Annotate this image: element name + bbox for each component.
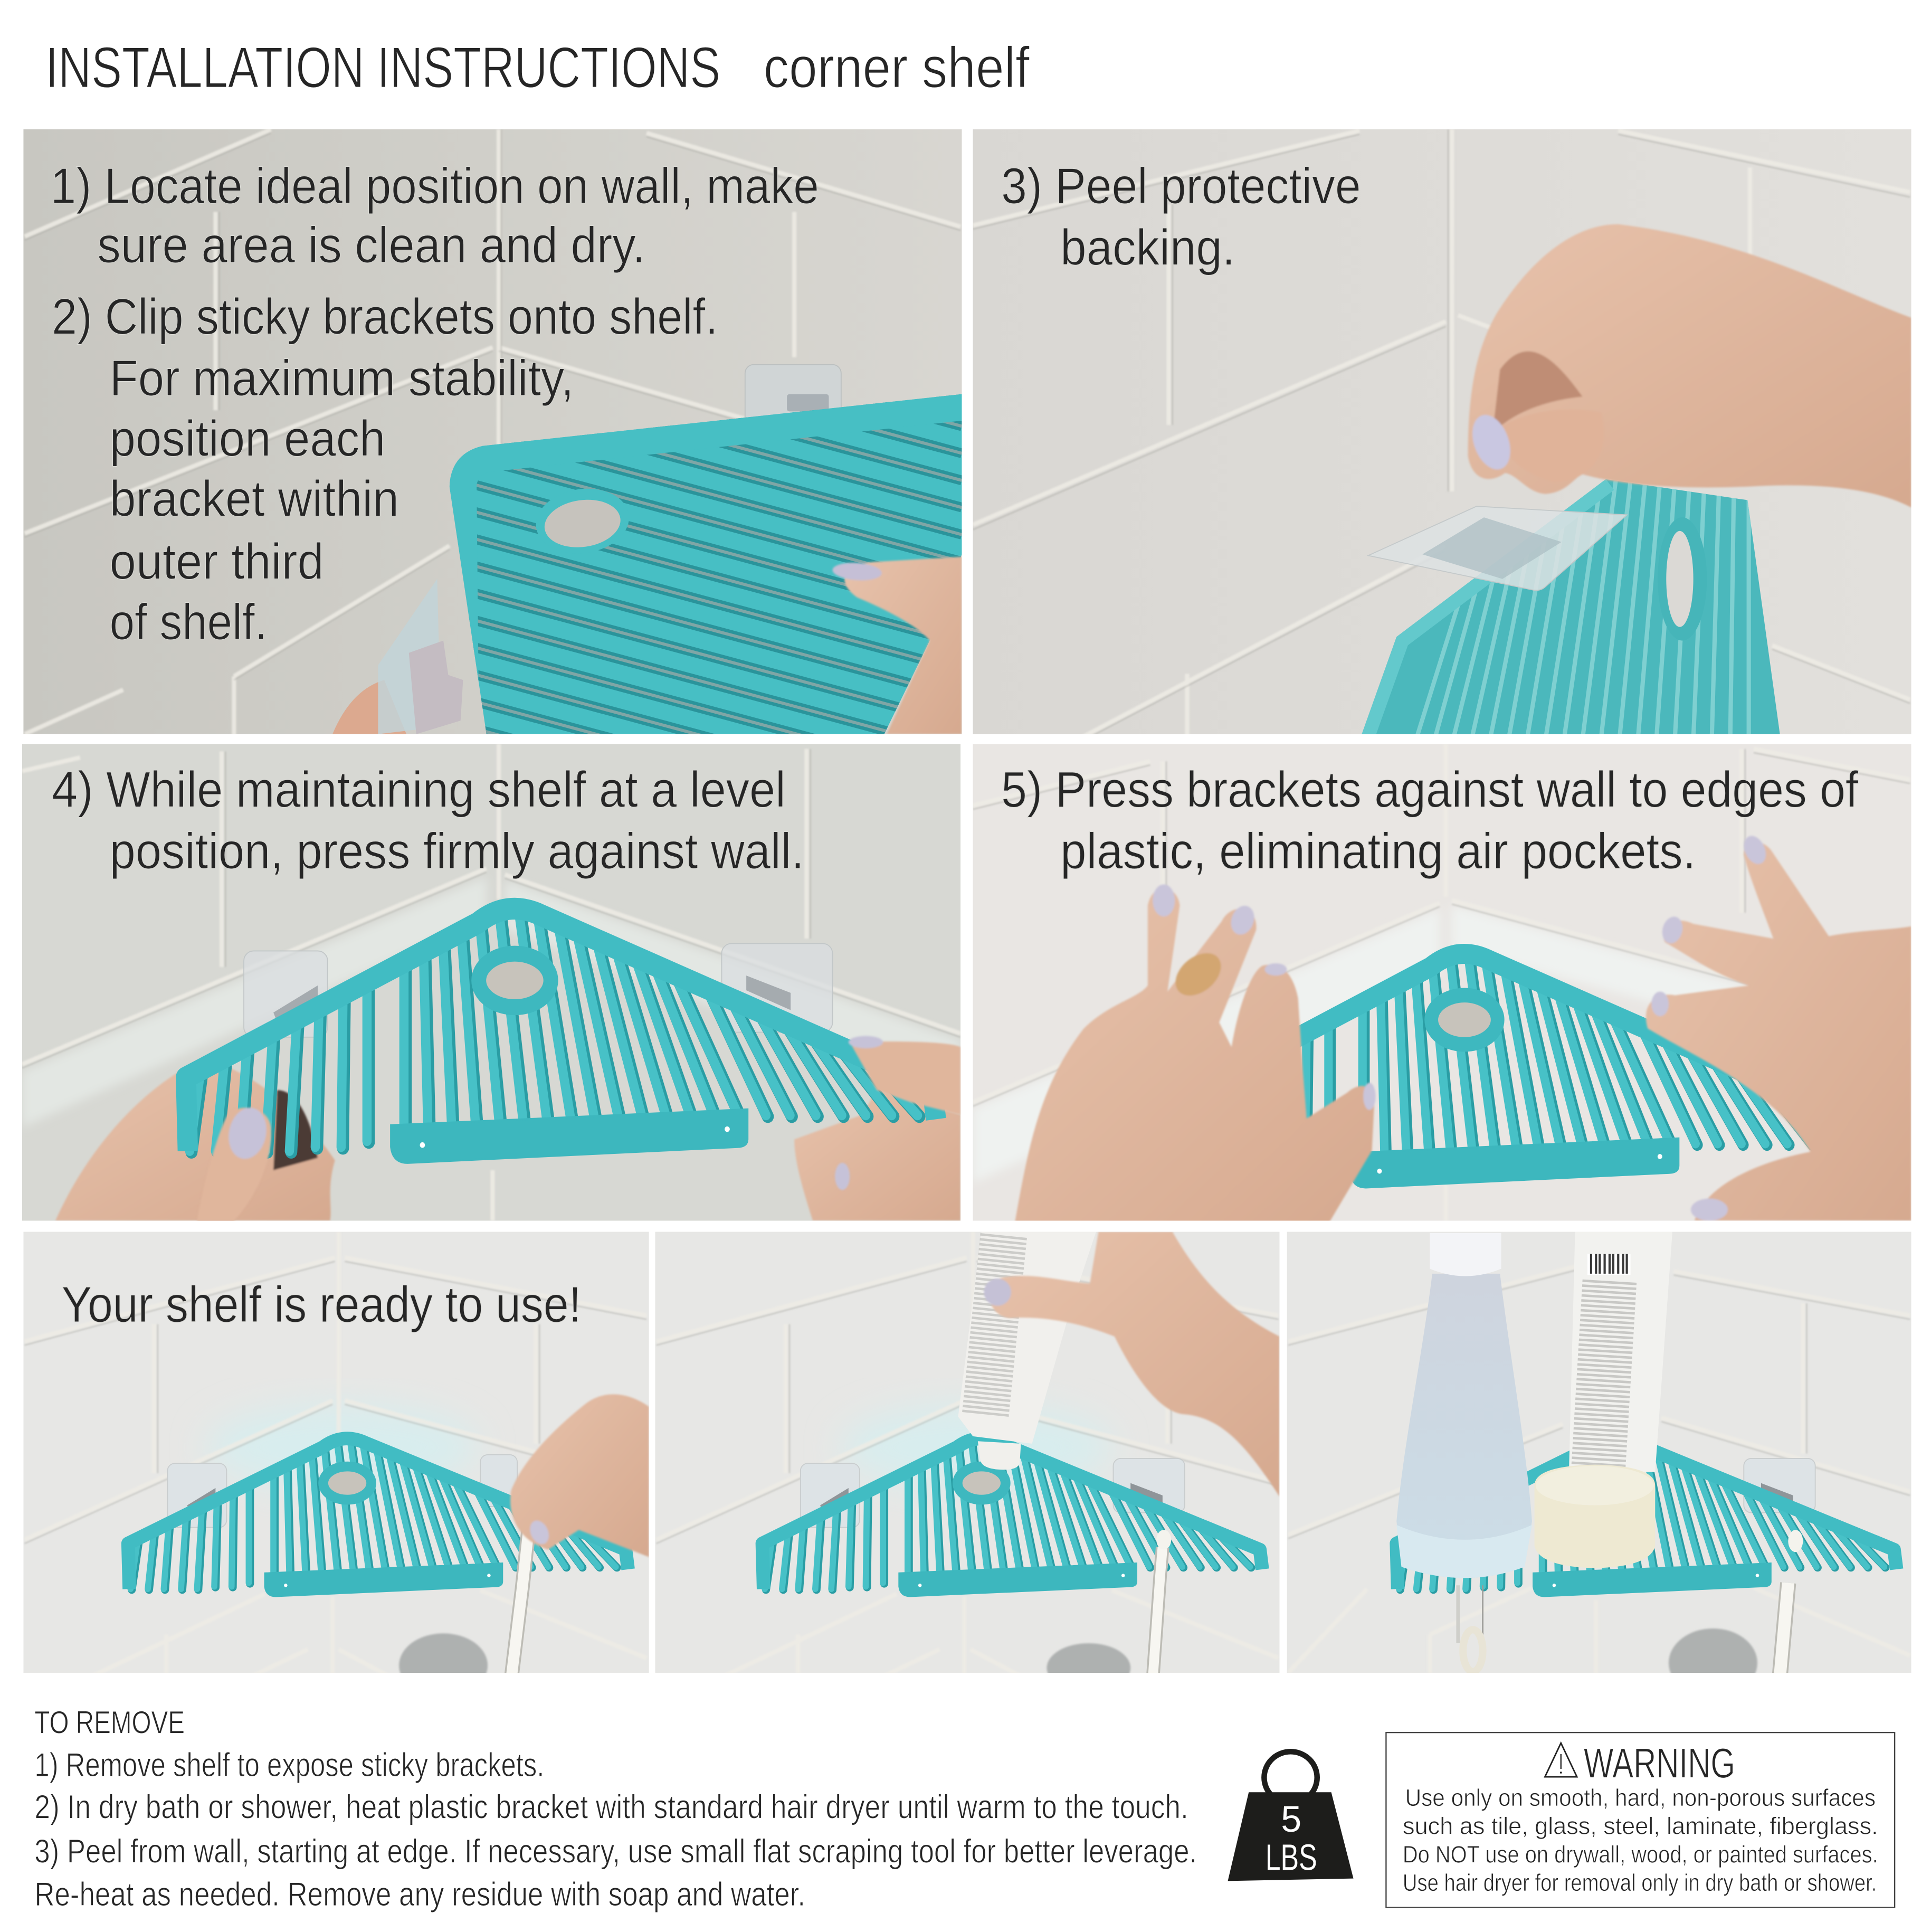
instruction text 1 and 2: 1) Locate ideal position on wall, make (51, 158, 819, 214)
right hand behind shelf (794, 1090, 960, 1221)
teal shelf (450, 394, 962, 734)
instruction text 5: plastic, eliminating air pockets. (1060, 823, 1696, 879)
instruction text 3: 3) Peel protective (1001, 158, 1361, 214)
to remove instructions: 3) Peel from wall, starting at edge. If necessary, use small flat scraping tool for better leverage. (34, 1833, 1197, 1870)
icon: 5 lbs weight: LBS (1266, 1836, 1317, 1878)
instruction text 1 and 2: bracket within (110, 471, 399, 527)
wall background (23, 129, 962, 734)
title: corner shelf (764, 36, 1030, 100)
icon: 5 lbs weight: 5 (1281, 1798, 1301, 1840)
icon: warning triangle (1545, 1743, 1577, 1777)
hand on tube (984, 1232, 1280, 1497)
panel: shelf loaded with bottles and soap (1287, 1232, 1911, 1698)
warning box: WARNING (1584, 1739, 1735, 1786)
bracket (1744, 1459, 1815, 1513)
instruction text 4: 4) While maintaining shelf at a level (52, 761, 786, 818)
teal shelf edge-on (1355, 474, 1786, 745)
panel: step 3 peel backing (973, 129, 1911, 745)
left hand pressing (1015, 884, 1376, 1223)
hand peeling backing (1466, 224, 1911, 507)
panel: step 1 and 2 locate position and clip brackets (23, 129, 962, 734)
warning box (1386, 1732, 1895, 1907)
teal shelf (128, 1438, 628, 1596)
warning box: such as tile, glass, steel, laminate, fiberglass. (1403, 1813, 1878, 1840)
to remove instructions: Re-heat as needed. Remove any residue with soap and water. (34, 1876, 805, 1913)
panel: placing tube on shelf (655, 1232, 1280, 1692)
bracket (801, 1459, 1185, 1528)
teal shelf (186, 908, 936, 1163)
wall background (655, 1232, 1280, 1673)
rope, hook and loofah (1458, 1530, 1803, 1698)
wall background (973, 744, 1911, 1221)
instruction text 3: backing. (1060, 220, 1235, 276)
to remove instructions: 2) In dry bath or shower, heat plastic bracket with standard hair dryer until warm to the touch. (34, 1788, 1188, 1825)
to remove instructions (34, 1704, 1197, 1913)
instruction text 1 and 2: 2) Clip sticky brackets onto shelf. (52, 288, 718, 345)
instruction text 1 and 2: of shelf. (110, 594, 267, 650)
sticky bracket bottom (332, 579, 463, 734)
hand holding shelf (832, 557, 962, 734)
rope and loofah (399, 1521, 529, 1698)
panel: shelf ready with loofah (23, 1232, 649, 1698)
instruction text 1 and 2: position each (110, 410, 385, 467)
instruction text 3 (1001, 158, 1361, 276)
instruction text 1 and 2: outer third (110, 534, 324, 590)
right hand pressing (1646, 832, 1911, 1221)
thumb and fingers on top (197, 1036, 960, 1221)
brackets (244, 943, 832, 1037)
teal shelf (1396, 1438, 1897, 1596)
soap bar (1535, 1465, 1655, 1568)
to remove instructions: 1) Remove shelf to expose sticky brackets. (34, 1747, 544, 1784)
panel: step 4 press against wall (22, 744, 960, 1221)
instruction text 4 (52, 761, 804, 879)
translucent bottle (1396, 1233, 1532, 1578)
warning box: Use only on smooth, hard, non-porous surfaces (1405, 1784, 1876, 1811)
teal shelf (1162, 954, 1852, 1188)
instruction text 5: 5) Press brackets against wall to edges of (1001, 761, 1859, 818)
instruction text 1 and 2: sure area is clean and dry. (97, 217, 645, 273)
instruction text 1 and 2 (51, 158, 819, 650)
ready text: Your shelf is ready to use! (62, 1276, 581, 1333)
instruction text 5 (1001, 761, 1859, 879)
wall background (23, 1232, 649, 1673)
instruction text 4: position, press firmly against wall. (110, 823, 804, 879)
hand holding rope (510, 1394, 649, 1557)
to remove instructions: TO REMOVE (34, 1704, 185, 1740)
title: INSTALLATION INSTRUCTIONS (45, 36, 720, 100)
wall background (973, 129, 1911, 734)
sticky bracket top (744, 364, 842, 418)
white shampoo bottle (1569, 1232, 1672, 1472)
wall background (22, 744, 960, 1221)
rope and loofah (1047, 1530, 1171, 1692)
brackets (167, 1455, 517, 1528)
wall background (1287, 1232, 1911, 1673)
teal shelf (762, 1438, 1262, 1596)
warning box: Do NOT use on drywall, wood, or painted surfaces. (1403, 1841, 1878, 1868)
left hand palm (55, 1059, 335, 1221)
panel: step 5 press brackets (973, 744, 1911, 1223)
peeled clear bracket (1368, 506, 1627, 590)
instruction text 1 and 2: For maximum stability, (110, 350, 574, 406)
white tube (958, 1232, 1096, 1470)
icon: 5 lbs weight (1228, 1751, 1354, 1881)
